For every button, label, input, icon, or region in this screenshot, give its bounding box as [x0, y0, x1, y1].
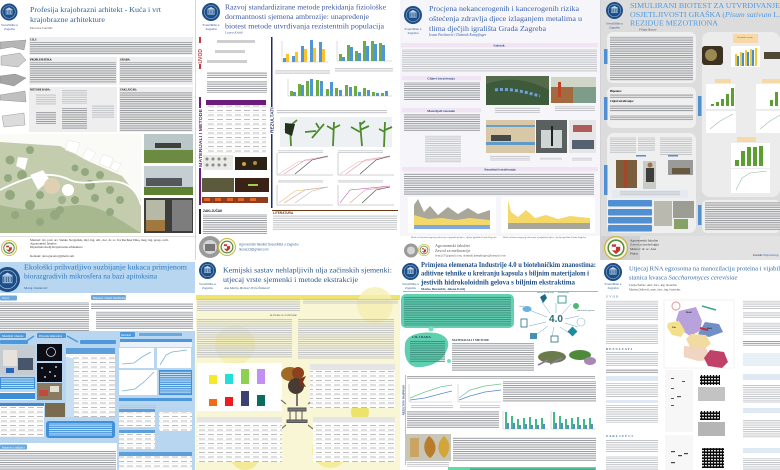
table: tocopherols — [313, 417, 395, 462]
section: materijali i metode: MATERIJALI I METODE — [198, 108, 204, 167]
panel: footer mezotrion — [601, 236, 780, 260]
icon: faculty logo — [1, 240, 17, 256]
text block: hipoteza i ciljevi — [604, 87, 696, 128]
title: biorazgradivih mikrosfera na bazi apitoksina — [24, 272, 158, 280]
callout: chart notes — [159, 370, 192, 395]
callout: cilj rada — [405, 326, 451, 367]
site plan — [0, 134, 141, 233]
bar chart: middle — [288, 79, 392, 96]
line chart: release 1 — [409, 384, 453, 409]
bar chart: green 1 — [706, 79, 735, 109]
icon: university logo: Sveučilište u — [203, 23, 220, 27]
icon: university logo — [402, 263, 419, 290]
icon: university logo: Sveučilište u — [405, 27, 422, 31]
text block: hipoteza: Hipoteza i ciljevi istraživanja — [93, 297, 127, 300]
table: fatty acids left — [197, 417, 282, 462]
icon: university logo — [404, 6, 422, 35]
captions: hazard charts: Rizik od kancerogenog oštećenja u populaciji djece, dječja igrališta Grada Zagreba — [503, 236, 587, 239]
icon: university logo: Zagrebu — [4, 27, 15, 31]
diagram: exosome pathway: Tub — [672, 327, 677, 329]
captions: photos — [495, 106, 595, 113]
title: Ana Marija Mohrač Petra Šimković — [223, 285, 270, 290]
title: Profesija krajobrazni arhitekt - Kuća i vrt — [30, 5, 162, 14]
photo: insects — [45, 403, 65, 417]
photo: field peas — [616, 160, 637, 188]
title — [428, 4, 582, 37]
diagram: industry 4.0: 4.0 — [549, 314, 563, 325]
title: jestivih hidrokoloidnih gelova s biljnim ekstraktima — [420, 280, 576, 286]
title: Ivana Pavlinović i Dominik Kempfinger — [428, 33, 487, 37]
bar chart: tensile — [503, 411, 548, 429]
text block: department: Zavod za herbologiju — [630, 242, 659, 246]
text block: zaključak — [119, 87, 193, 132]
photo: pea roots — [654, 201, 694, 229]
line chart: germination 1 — [277, 150, 333, 175]
bar chart: top right — [337, 41, 392, 61]
text block: department: Agronomski fakultet — [630, 238, 658, 242]
text block: materijali i metode — [452, 338, 534, 371]
photo: extraction apparatus — [536, 120, 567, 153]
text block: rasprava i zaključci: Rasprava i zaključci — [2, 446, 25, 449]
text block: ciljevi: Ciljevi istraživanja — [427, 77, 455, 81]
header: rezultati — [120, 332, 182, 337]
text block: authors: Lucija Šerbac, univ. bacc. ing. biotechn. — [629, 282, 677, 288]
text block: zavod: Zavod za melioracije — [435, 248, 470, 253]
photo: lavender — [538, 351, 566, 365]
icon: university logo: Zagrebu — [408, 31, 419, 35]
line chart: dose 2 — [756, 111, 780, 133]
title — [24, 262, 187, 290]
title: tlima dječjih igrališta Grada Zagreba — [429, 24, 547, 33]
panel: materijali i metode — [604, 133, 696, 233]
line chart: release right — [157, 348, 191, 368]
icon: university logo — [0, 267, 20, 292]
panel: poster ambrozija — [196, 0, 400, 236]
text block: mentors: Kontakt: dora.garasic@gmail.com — [30, 254, 74, 258]
photo: pea pots strip — [764, 52, 780, 59]
title — [629, 266, 780, 282]
title: Kemijski sastav nehlapljivih ulja začinskih sjemenki: — [223, 266, 392, 274]
section: rezultati: REZULTATI — [606, 347, 633, 351]
header: rezultati: Rezultati — [121, 334, 131, 337]
title: biotest metode utvrđivanja rezistentnih populacija — [225, 22, 385, 30]
title: Marko Buranbić, Jelena Krulj — [421, 287, 465, 291]
gel: blots right — [698, 375, 725, 468]
section: rezultati vertical label — [402, 375, 406, 465]
callout: method notes — [46, 421, 115, 438]
bar chart: elongation — [551, 411, 596, 429]
text block: mentors — [30, 238, 169, 258]
text block: contact — [239, 242, 299, 252]
text block: uvod: Uvod — [2, 296, 9, 300]
area chart: hazard right — [501, 197, 595, 233]
diagram: industry 4.0 — [519, 291, 595, 342]
title: Razvoj standardizirane metode prekidanja fiziološke — [225, 2, 387, 12]
icon: university logo: Sveučilište u — [605, 282, 622, 286]
panel: poster krajobrazni arhitekt — [0, 0, 196, 260]
section: uvod: UVOD — [606, 294, 619, 298]
area chart: hazard left — [408, 197, 496, 233]
line chart: germination 2 — [338, 150, 394, 175]
icon: university logo: Zagrebu — [405, 286, 416, 290]
flow chart: metode rada — [29, 87, 117, 132]
text block: uvod — [0, 293, 195, 331]
text block: department: Pintar — [630, 252, 639, 256]
diagram: exosome pathway: MtrK — [686, 312, 692, 314]
panel: poster mezotrion — [601, 0, 780, 236]
text block: cilj — [29, 37, 193, 55]
panel: poster kemijski sastav — [196, 260, 400, 470]
title: dormantnosti sjemena ambrozije: unapređenje — [225, 12, 370, 21]
gel: blot left — [665, 370, 693, 432]
photo: microscopy — [37, 344, 62, 400]
section: uvod: UVOD — [198, 49, 204, 64]
photo: seed plates — [203, 155, 267, 170]
bar chart: top left — [282, 40, 328, 62]
text block: literatura: LITERATURA — [273, 211, 294, 215]
section: rezultati vertical label: REZULTATI I RASPRAVA — [402, 385, 406, 415]
icon: faculty logos — [404, 244, 430, 258]
bar chart: green 2 — [756, 79, 780, 109]
photo: lab shelves — [486, 120, 535, 153]
section: zaključci — [606, 433, 658, 470]
photo: house — [144, 134, 193, 163]
text label: biotest box — [612, 190, 688, 198]
text block: conclusions — [453, 437, 596, 462]
captions: charts — [275, 68, 393, 114]
title: Procjena nekancerogenih i kancerogenih rizika — [429, 4, 580, 13]
diagram: exosome pathway — [664, 300, 734, 368]
text block: uvod — [197, 298, 398, 311]
text block: contact: Kontakt: filipa.barac@ — [753, 254, 779, 257]
section: uvod — [606, 294, 658, 344]
callout: cilj rada: CILJ RADA — [412, 335, 431, 339]
icon: university logo — [604, 263, 622, 290]
photo: thyme — [569, 350, 596, 365]
text block: department — [630, 238, 659, 256]
title: SIMULIRANI BIOTEST ZA UTVRĐIVANJE — [630, 2, 780, 10]
title: Maraj Orešković — [24, 286, 48, 290]
bar chart: green 3 — [731, 137, 770, 168]
panel: poster ekološki insekticid — [0, 262, 195, 470]
icon: extraction apparatus — [287, 408, 307, 422]
diagram: industry 4.0: cloud — [519, 306, 523, 308]
photo: laboratory — [0, 345, 35, 375]
text block: materijali — [402, 108, 481, 163]
text block: hipoteza i ciljevi: Hipoteza: — [610, 90, 622, 93]
text block: rezultati: Rezultati istraživanja — [484, 168, 516, 172]
title — [30, 5, 162, 30]
section headers: materijali i metode: Materijali i metode — [2, 335, 24, 338]
title: Dorotea Garašić — [30, 26, 53, 30]
photo: house 2 — [144, 166, 193, 195]
background: yellow panel — [196, 287, 400, 470]
title: utjecaj vrste sjemenki i metode ekstrakcije — [223, 275, 359, 284]
text block: problematika: PROBLEMATIKA: — [30, 58, 52, 62]
section: uvod — [198, 37, 267, 93]
callout: zaključak bar — [448, 467, 596, 470]
text block: materijali i metode: MATERIJALI I METODE — [452, 338, 489, 342]
text block: rasprava i zaključci — [0, 443, 117, 470]
icon: university logo: Zagrebu — [206, 27, 217, 31]
icon: university logo: Zagrebu — [202, 286, 213, 290]
text column: right — [743, 300, 780, 470]
text block: results right — [503, 381, 596, 402]
table: materials — [0, 403, 44, 437]
table: treatments — [66, 348, 115, 417]
list: measured parameters — [608, 200, 652, 232]
section: zaključak — [199, 208, 267, 234]
diagram: industry 4.0: umjetna inteligencija — [537, 291, 554, 294]
captions: hazard charts — [411, 236, 587, 239]
text block: hipoteza i ciljevi: Ciljevi istraživanja: — [610, 100, 634, 103]
line chart: release 2 — [458, 384, 501, 409]
bar chart: top: Rezultati za masu — [737, 37, 754, 39]
text block: uvod — [604, 32, 696, 83]
icon: university logo — [0, 4, 18, 31]
line chart: germination 3 — [277, 180, 333, 205]
photo: terrace — [144, 198, 193, 233]
icon: university logo: Sveučilište u — [402, 282, 419, 286]
text block: contact: Agronomski fakultet Sveučilišta u Zagrebu — [239, 242, 299, 246]
text block: zaključci — [698, 200, 780, 233]
text block: literatura — [272, 210, 398, 230]
gel: lower left — [665, 435, 693, 470]
icon: university logo: Sveučilište u — [199, 282, 216, 286]
title: Ekološki prihvatljivo suzbijanje kukaca primjenom — [24, 262, 187, 272]
title: aditivne tehnike u kreiranju kapsula s biljnim materijalom i — [421, 270, 589, 278]
panel: footer metali — [400, 240, 600, 260]
title — [630, 2, 780, 32]
text block: materijali i metode — [197, 314, 394, 359]
icon: university logo — [606, 2, 623, 30]
text block: ciljevi — [402, 76, 481, 100]
photo: student — [643, 161, 656, 189]
section: rezultati: REZULTATI — [270, 107, 276, 133]
icon: university logo: Sveučilište u — [1, 23, 18, 27]
icon: section sketches — [0, 40, 26, 127]
text block: authors — [629, 282, 681, 292]
bar chart: top — [731, 34, 760, 67]
title: Filipa Barać — [638, 28, 657, 32]
map: playgrounds — [486, 76, 549, 105]
panel: poster RNA egzosomi — [601, 260, 780, 470]
table: treatments — [206, 100, 266, 153]
text block: results left — [407, 411, 499, 429]
text block: materijali i metode: MATERIJALI I METODE — [270, 314, 297, 317]
diagram: industry 4.0: kibernetička sigurnost — [577, 309, 595, 312]
icon: university logo — [202, 3, 220, 31]
section: zaključak: ZAKLJUČAK — [203, 208, 223, 213]
text block: zaključak: ZAKLJUČAK: — [120, 88, 137, 92]
text block: rezultati — [402, 167, 598, 195]
line chart: dose 1 — [706, 111, 736, 133]
photo: reagents — [569, 120, 596, 153]
photo: tray — [668, 160, 693, 175]
tables: toxicity — [119, 398, 192, 470]
panel: poster industrija 4.0 — [400, 260, 600, 470]
photo: capsules and leaf films — [405, 434, 451, 461]
text block: građa — [119, 57, 193, 85]
panel: poster metali u tlima — [400, 0, 601, 260]
callout: uvod — [401, 294, 514, 328]
text block: sažetak — [401, 43, 598, 72]
title — [224, 2, 387, 34]
text block: mentors: Diplomski studij Krajobrazna arhitektura — [30, 245, 83, 249]
title — [420, 262, 596, 291]
arrows: to tables — [281, 400, 313, 429]
panel: footer krajobrazni — [0, 236, 195, 262]
title: OSJETLJIVOSTI GRAŠKA ( Pisum sativum L. — [630, 10, 780, 19]
title: stanica kvasca Saccharomyces cerevisiae — [629, 274, 738, 282]
section: materijali i metode — [198, 97, 204, 205]
text block: zavod: Agronomski fakultet — [435, 243, 471, 248]
icon: spice seeds — [281, 367, 306, 394]
captions: hazard charts: Rizik od nekancerogenog oštećenja u populaciji djece, dječja igrališta Grada Zagreba — [411, 236, 497, 239]
photo: playgrounds — [551, 77, 596, 103]
title: oštećenja zdravlja djece izlaganjem metalima u — [429, 14, 582, 23]
text block: mentors: Agronomski fakultet — [30, 242, 57, 246]
caption: capsules — [407, 462, 449, 467]
captions: lab — [490, 155, 592, 161]
diagram: industry 4.0: komunikacija — [558, 292, 569, 294]
line chart: dose 3 — [731, 169, 770, 193]
table: results top — [120, 339, 192, 347]
text block: authors: Marina Orlković, univ. bacc. ing. biotechn. — [629, 288, 681, 292]
line chart: release left — [119, 348, 154, 368]
text block: materijali: Materijali i metode — [427, 109, 455, 113]
icon: university logo: Zagrebu — [608, 286, 619, 290]
arrow: seeds to extraction — [296, 394, 298, 406]
title: Primjena elemenata Industrije 4.0 u biotehničkim znanostima: — [421, 262, 596, 269]
icon: university logo: Sveučilište u — [606, 22, 623, 26]
table: fatty acids right — [310, 364, 395, 408]
text block: blue notes — [0, 377, 35, 400]
icon: university logo: Zagrebu — [609, 26, 620, 30]
text block: problematika — [29, 57, 117, 85]
section: rezultati — [606, 347, 658, 423]
icon: university logo — [199, 262, 216, 290]
text block: contact: lkurazz3@gmail.com — [239, 248, 269, 252]
panel: footer ambrozija — [199, 236, 299, 258]
photo: soil and seedlings — [202, 178, 269, 203]
photo: ragweed plants — [280, 117, 392, 147]
diagram: exosome pathway: MxK — [707, 328, 712, 330]
icon: faculty logo — [605, 237, 627, 259]
panel: rezultati background — [698, 32, 780, 197]
bar chart: oil yields — [197, 363, 282, 411]
text block: hipoteza — [91, 295, 193, 329]
line chart: germination 4 — [338, 180, 394, 205]
text block: department: Mentor: dr. sc. Ana — [630, 247, 657, 251]
icon: faculty logos — [199, 236, 236, 258]
text block: zavod — [435, 243, 506, 258]
line chart: release lower — [119, 370, 157, 395]
section headers: materijali i metode: Priprema mikrosfera — [39, 335, 63, 338]
section headers: materijali i metode — [0, 333, 116, 344]
title: REZIDUE MEZOTRIONA — [630, 20, 719, 28]
title: krajobrazne arhitekture — [30, 15, 106, 24]
text block: results intro — [407, 376, 595, 379]
text block: zavod: ivana237@gmail.com, dominik.kempfinger@hotmail.com — [435, 254, 506, 258]
text block: sažetak: Sažetak — [493, 44, 505, 48]
flow chart: metode rada: METODE RADA: — [30, 88, 51, 92]
photo: pea in pot — [702, 46, 723, 65]
text block: cilj: CILJ: — [30, 38, 37, 42]
section: zaključci: ZAKLJUČCI — [606, 433, 634, 438]
title: Laura Križić — [224, 30, 243, 34]
text block: mentors: Mentori: izv. prof. art. Stanko Stergaršek, dipl. ing. arh., doc. dr. sc. Iva Rechner Dika, mag. ing. prosp. arch. — [30, 238, 169, 243]
text block: građa: GRAĐA: — [120, 58, 131, 62]
title — [223, 266, 392, 290]
